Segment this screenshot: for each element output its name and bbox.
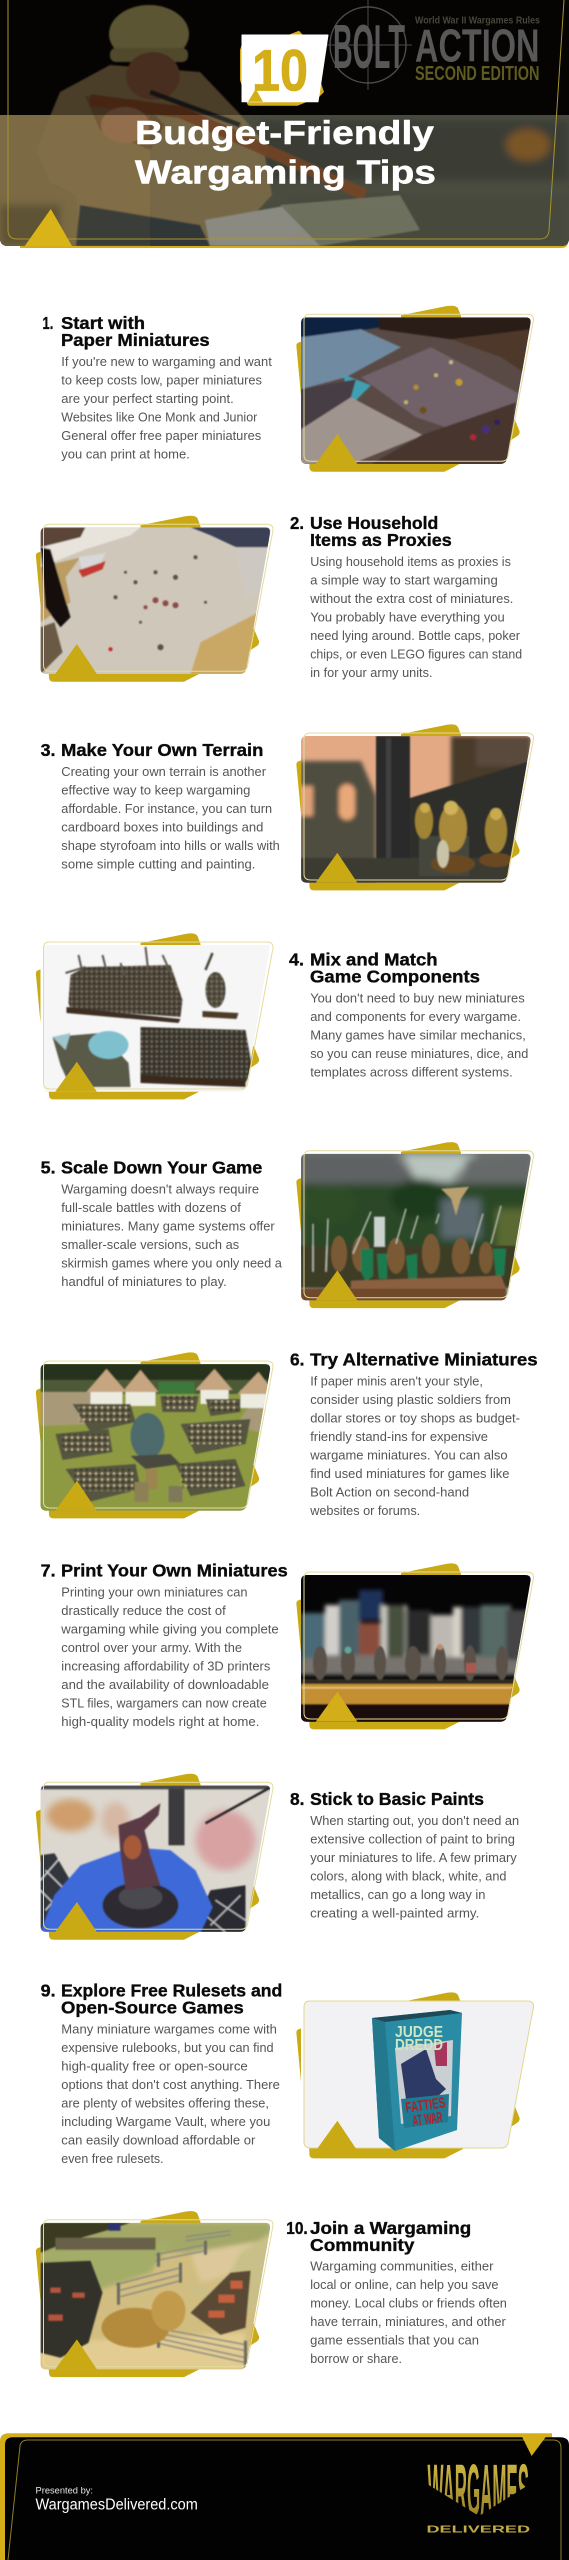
presented by text: Presented by: (36, 2485, 93, 2496)
text block: You don't need to buy new miniatures (310, 990, 525, 1005)
heading: 1. (42, 313, 53, 333)
text block: metallics, can go a long way in (310, 1887, 486, 1902)
text block (309, 1373, 520, 1518)
heading: 8. (290, 1789, 304, 1809)
text block: STL files, wargamers can now create (61, 1695, 267, 1710)
Bolt Action logo (325, 0, 540, 90)
game box (372, 2010, 462, 2151)
header banner (0, 0, 569, 248)
underline (20, 240, 568, 248)
text block: dollar stores or toy shops as budget- (310, 1410, 520, 1425)
panel: tip 8 (36, 1774, 519, 1940)
heading: Start with (61, 313, 145, 333)
text block (309, 554, 522, 680)
text block: Many games have similar mechanics, (310, 1027, 526, 1042)
text block: including Wargame Vault, where you (61, 2114, 270, 2129)
heading: Game Components (310, 967, 480, 987)
text block: without the extra cost of miniatures. (309, 591, 513, 606)
text block: high-quality free or open-source (61, 2059, 248, 2074)
footer panel (5, 2437, 569, 2560)
text block: your miniatures to life. A few primary (310, 1850, 517, 1865)
photo: army on green field (36, 1352, 275, 1518)
text block: full-scale battles with dozens of (61, 1200, 241, 1215)
text block (310, 990, 528, 1079)
text block: Creating your own terrain is another (61, 764, 267, 779)
text block: effective way to keep wargaming (61, 782, 250, 798)
heading: 7. (41, 1560, 56, 1580)
text block: Bolt Action on second-hand (310, 1484, 469, 1499)
text block: some simple cutting and painting. (61, 856, 255, 872)
text block: expensive rulebooks, but you can find (61, 2040, 274, 2055)
photo: elf warriors in landscape (296, 1142, 534, 1308)
heading: Paper Miniatures (61, 330, 210, 350)
text block: so you can reuse miniatures, dice, and (310, 1046, 528, 1061)
text block: high-quality models right at home. (61, 1714, 259, 1729)
text block: General offer free paper miniatures (61, 428, 262, 443)
text block: If paper minis aren't your style, (310, 1373, 483, 1388)
footer frame line (8, 2440, 561, 2560)
heading (289, 950, 480, 987)
text block: wargame miniatures. You can also (309, 1447, 508, 1462)
text block: are your perfect starting point. (61, 391, 234, 406)
photo: paper miniatures on table (296, 306, 534, 472)
text block: and the availability of downloadable (61, 1677, 269, 1692)
frame line (8, 0, 564, 239)
heading (286, 2218, 471, 2255)
text block: Using household items as proxies is (310, 554, 511, 569)
photo: battlefield with fences (36, 2211, 273, 2377)
panel: tip 10 (36, 2211, 507, 2377)
heading (290, 513, 452, 550)
game box: AT WAR (411, 2109, 443, 2130)
text block: Wargaming communities, either (310, 2259, 494, 2274)
text block: can easily download affordable or (61, 2133, 256, 2148)
text block (310, 1813, 519, 1920)
corner triangle (25, 209, 72, 246)
game box: JUDGE (395, 2024, 443, 2041)
Wargames Delivered logo: DELIVERED (426, 2524, 531, 2536)
text block: templates across different systems. (310, 1064, 513, 1079)
heading: 6. (290, 1349, 304, 1369)
text block: Websites like One Monk and Junior (61, 410, 258, 424)
heading: 2. (290, 513, 304, 533)
heading: Make Your Own Terrain (61, 740, 263, 760)
footer top band (0, 2433, 552, 2560)
heading (41, 1981, 282, 2018)
text block: wargaming while giving you complete (60, 1621, 279, 1636)
text block: game essentials that you can (310, 2333, 479, 2348)
Wargames Delivered logo (428, 2464, 530, 2532)
heading: Items as Proxies (310, 530, 452, 550)
text block: miniatures. Many game systems offer (61, 1219, 275, 1234)
photo: boxed game (296, 1992, 534, 2158)
triangle marker (521, 2434, 548, 2456)
text block: money. Local clubs or friends often (310, 2296, 507, 2311)
heading: 10. (286, 2218, 308, 2238)
panel: tip 6 (36, 1349, 538, 1518)
heading (42, 313, 210, 350)
text block: control over your army. With the (61, 1640, 242, 1655)
text block: You probably have everything you (310, 610, 505, 624)
heading: Try Alternative Miniatures (310, 1349, 538, 1369)
text block: consider using plastic soldiers from (310, 1392, 511, 1407)
presented by text (36, 2485, 198, 2513)
title: Wargaming Tips (135, 153, 436, 190)
text block: handful of miniatures to play. (61, 1274, 227, 1289)
Bolt Action logo: BOLT (333, 13, 405, 82)
text block: chips, or even LEGO figures can stand (310, 646, 522, 662)
text block: you can print at home. (61, 446, 190, 462)
heading: Mix and Match (310, 950, 438, 970)
panel: tip 2 (36, 513, 522, 682)
text block: find used miniatures for games like (310, 1466, 509, 1481)
text block (61, 354, 272, 462)
text block: affordable. For instance, you can turn (61, 801, 272, 816)
text block: Many miniature wargames come with (61, 2022, 277, 2037)
text block: even free rulesets. (61, 2151, 164, 2166)
text block: are plenty of websites offering these, (61, 2096, 269, 2111)
text block: shape styrofoam into hills or walls with (61, 838, 280, 853)
panel: tip 3 (41, 724, 534, 890)
Bolt Action logo: World War II Wargames Rules (415, 14, 540, 26)
text block: extensive collection of paint to bring (310, 1832, 515, 1846)
text block: have terrain, miniatures, and other (310, 2314, 506, 2329)
text block: drastically reduce the cost of (61, 1603, 226, 1618)
heading: Open-Source Games (61, 1998, 244, 2018)
number badge: 10 (252, 39, 308, 104)
heading: Explore Free Rulesets and (61, 1981, 282, 2001)
photo: painting a miniature (36, 1774, 273, 1940)
text block (61, 764, 280, 872)
number badge (240, 31, 328, 106)
heading: Print Your Own Miniatures (61, 1560, 288, 1580)
text block: cardboard boxes into buildings and (61, 820, 263, 834)
text block (60, 1584, 279, 1729)
Wargames Delivered logo: WARGAMES (428, 2449, 529, 2532)
text block: colors, along with black, white, and (310, 1868, 506, 1884)
heading: Scale Down Your Game (61, 1158, 263, 1178)
text block: in for your army units. (310, 665, 432, 680)
title: Budget-Friendly (135, 114, 435, 151)
text block: websites or forums. (309, 1503, 420, 1518)
text block: friendly stand-ins for expensive (310, 1429, 488, 1444)
heading: Join a Wargaming (310, 2218, 471, 2238)
photo: miniature units on white (36, 933, 273, 1099)
text block: borrow or share. (310, 2351, 402, 2366)
panel: tip 9 (41, 1981, 534, 2166)
text block: a simple way to start wargaming (310, 572, 498, 588)
heading: Stick to Basic Paints (310, 1789, 484, 1809)
text block: need lying around. Bottle caps, poker (310, 628, 521, 643)
text block: options that don't cost anything. There (61, 2077, 280, 2092)
heading: 3. (41, 740, 56, 760)
band edge shade (50, 4, 241, 115)
photo: painted figures on shelf (296, 1563, 534, 1729)
text block: local or online, can help you save (310, 2277, 498, 2292)
text block: When starting out, you don't need an (310, 1813, 519, 1828)
heading: 5. (41, 1158, 56, 1178)
presented by text: WargamesDelivered.com (36, 2496, 198, 2513)
title (135, 114, 436, 190)
heading: Community (310, 2235, 415, 2255)
text block: Wargaming doesn't always require (61, 1182, 259, 1197)
text block: increasing affordability of 3D printers (61, 1658, 271, 1673)
footer (0, 2433, 569, 2560)
text block: creating a well-painted army. (310, 1906, 479, 1920)
panel: tip 7 (41, 1560, 534, 1729)
text block (61, 2022, 280, 2166)
text block: and components for every wargame. (310, 1009, 521, 1024)
game box: FATTIES (404, 2094, 446, 2117)
game box: DREDD (395, 2037, 443, 2054)
photo: map on table (36, 516, 273, 682)
text block: smaller-scale versions, such as (61, 1237, 240, 1252)
heading: 4. (289, 950, 304, 970)
text block: to keep costs low, paper miniatures (61, 372, 262, 388)
text block: Printing your own miniatures can (61, 1584, 247, 1599)
panel: tip 1 (42, 306, 534, 472)
text block (310, 2259, 507, 2366)
photo: terrain ruins and marines (296, 724, 534, 890)
heading: Use Household (310, 513, 438, 533)
text block: If you're new to wargaming and want (61, 354, 272, 369)
panel: tip 5 (41, 1142, 534, 1308)
heading: 9. (41, 1981, 56, 2001)
panel: tip 4 (36, 933, 528, 1099)
header photo: soldier (0, 0, 569, 246)
text block (61, 1182, 283, 1289)
text block: skirmish games where you only need a (61, 1256, 283, 1271)
